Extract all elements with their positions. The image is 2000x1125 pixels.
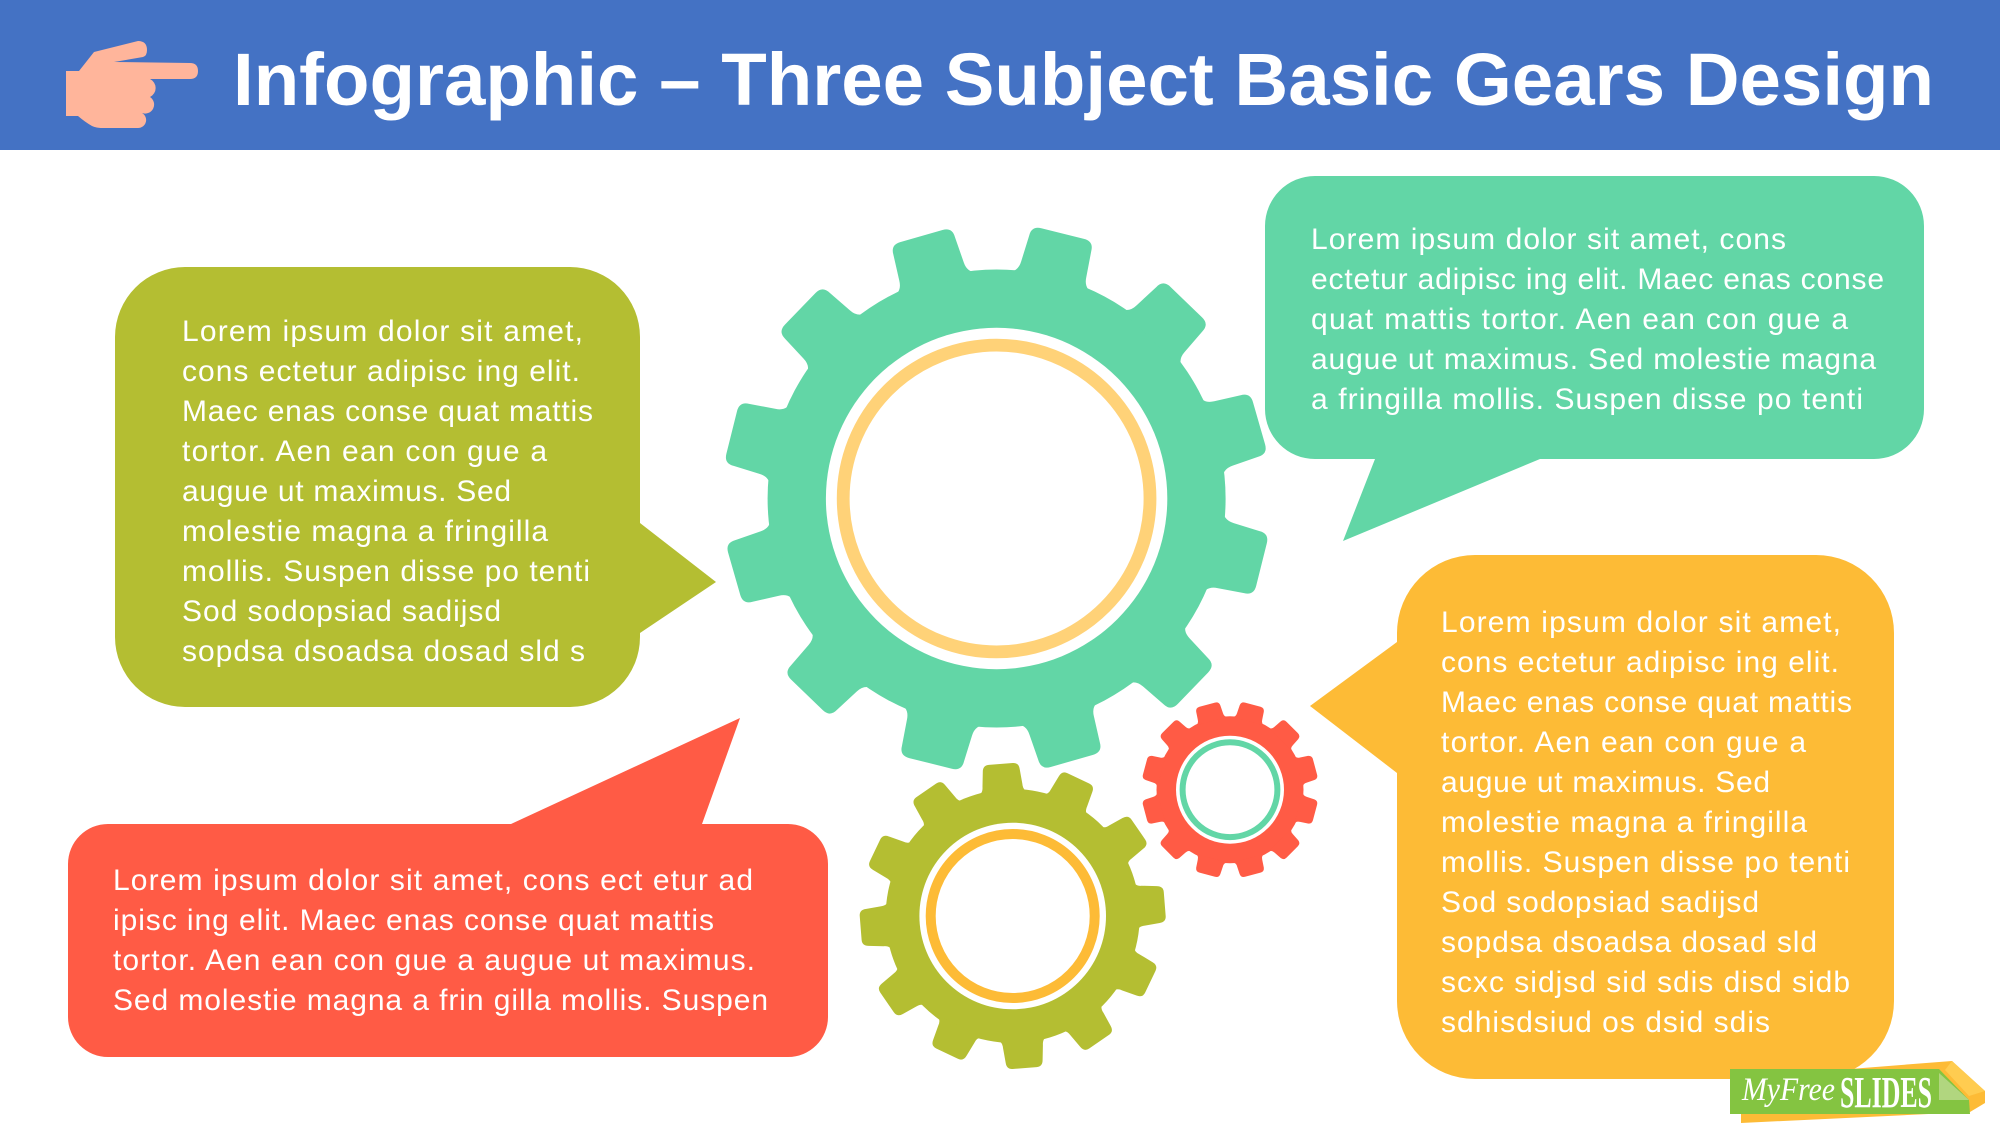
logo: MyFree Slides xyxy=(1730,1061,1985,1123)
panel: orange callout: mollis. Suspen disse po tenti xyxy=(1441,846,1850,879)
panel: green callout: a fringilla mollis. Suspen disse po tenti xyxy=(1311,383,1863,416)
panel: orange callout: cons ectetur adipisc ing elit. xyxy=(1441,646,1839,679)
header banner xyxy=(0,0,2000,150)
logo: MyFree Slides: MyFree xyxy=(1741,1072,1835,1108)
small red gear xyxy=(1141,700,1319,879)
panel: red callout: tortor. Aen ean con gue a augue ut maximus. xyxy=(113,944,755,977)
panel: orange callout: sdhisdsiud os dsid sdis xyxy=(1441,1006,1770,1039)
panel: red callout: ipisc ing elit. Maec enas conse quat mattis xyxy=(113,904,714,937)
panel: olive callout xyxy=(115,267,716,707)
panel: orange callout: augue ut maximus. Sed xyxy=(1441,766,1770,799)
panel: olive callout: tortor. Aen ean con gue a xyxy=(182,435,547,468)
panel: olive callout: Lorem ipsum dolor sit amet, xyxy=(182,315,583,348)
medium olive gear xyxy=(858,762,1167,1070)
panel: green callout: quat mattis tortor. Aen ean con gue a xyxy=(1311,303,1848,336)
panel: olive callout: Maec enas conse quat mattis xyxy=(182,395,593,428)
panel: orange callout: Sod sodopsiad sadijsd xyxy=(1441,886,1759,919)
panel: orange callout: sopdsa dsoadsa dosad sld xyxy=(1441,926,1817,959)
panel: red callout: Sed molestie magna a frin gilla mollis. Suspen xyxy=(113,984,768,1017)
panel: olive callout: sopdsa dsoadsa dosad sld s xyxy=(182,635,585,668)
title: Infographic – Three Subject Basic Gears Design xyxy=(233,38,1934,121)
panel: orange callout: Lorem ipsum dolor sit amet, xyxy=(1441,606,1841,639)
panel: orange callout: tortor. Aen ean con gue a xyxy=(1441,726,1806,759)
panel: green callout: augue ut maximus. Sed molestie magna xyxy=(1311,343,1876,376)
panel: orange callout: Maec enas conse quat mattis xyxy=(1441,686,1852,719)
panel: olive callout: mollis. Suspen disse po tenti xyxy=(182,555,590,588)
panel: olive callout: augue ut maximus. Sed xyxy=(182,475,511,508)
panel: green callout xyxy=(1265,176,1924,541)
panel: orange callout xyxy=(1310,555,1894,1079)
panel: orange callout: molestie magna a fringilla xyxy=(1441,806,1807,839)
panel: olive callout: molestie magna a fringilla xyxy=(182,515,548,548)
big green gear xyxy=(721,222,1273,775)
panel: red callout xyxy=(68,718,828,1057)
icon: pointing hand xyxy=(66,41,198,128)
panel: red callout: Lorem ipsum dolor sit amet, cons ect etur ad xyxy=(113,864,753,897)
panel: olive callout: cons ectetur adipisc ing elit. xyxy=(182,355,580,388)
logo: MyFree Slides: SLIDES xyxy=(1840,1068,1932,1117)
panel: olive callout: Sod sodopsiad sadijsd xyxy=(182,595,501,628)
panel: orange callout: scxc sidjsd sid sdis disd sidb xyxy=(1441,966,1850,999)
panel: green callout: Lorem ipsum dolor sit amet, cons xyxy=(1311,223,1786,256)
panel: green callout: ectetur adipisc ing elit. Maec enas conse xyxy=(1311,263,1884,296)
